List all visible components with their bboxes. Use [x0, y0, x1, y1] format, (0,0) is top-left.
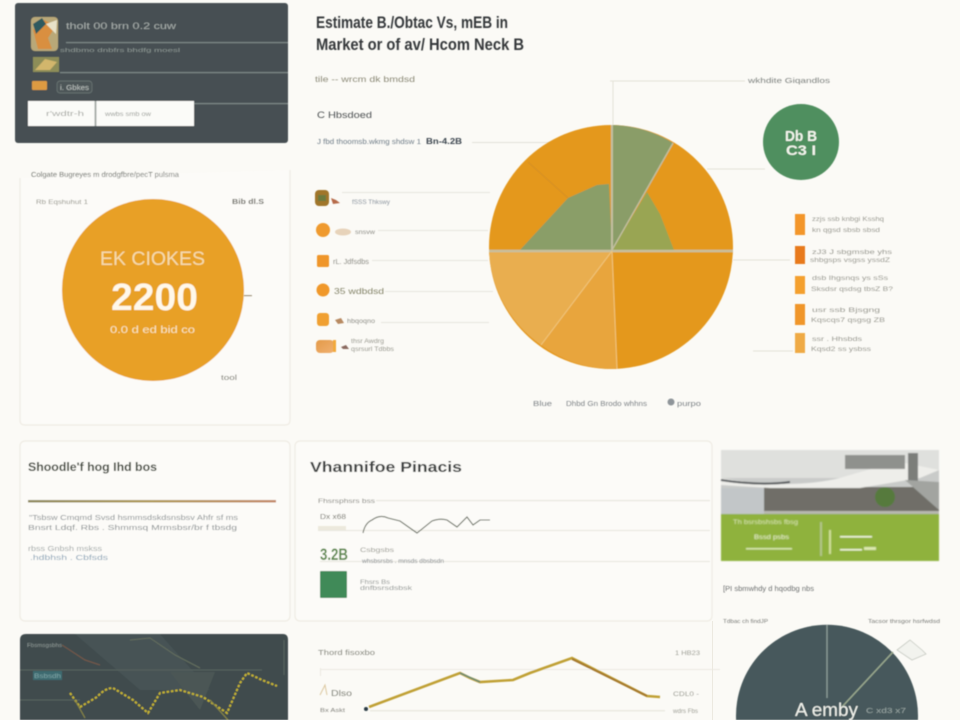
map labels: Fbsmsgsbhs [27, 643, 62, 649]
section detail line [317, 137, 570, 146]
right labels: 1 HB23 [675, 650, 700, 657]
title [316, 13, 524, 54]
pie value: A emby [795, 700, 858, 720]
legend item 2 [795, 246, 893, 264]
tick [244, 295, 252, 296]
slice: bottom left [489, 251, 612, 345]
green strip: Bssd psbs [754, 535, 789, 541]
icon: orange tag [32, 81, 47, 90]
panel: dark map [20, 634, 288, 720]
left caption: Rb Eqshuhut 1 [36, 199, 88, 206]
legend item 2: zJ3 J sbgmsbe yhs [812, 249, 893, 256]
footnote: tool [221, 375, 238, 382]
panel: trends card [295, 441, 712, 621]
panel: notes card [20, 441, 290, 621]
row 4 [316, 284, 493, 296]
small label chip: i. Gbkes [60, 85, 90, 92]
pie chart [489, 81, 793, 369]
row 4: 35 wdbdsd [334, 287, 384, 296]
orange stat circle [62, 199, 244, 381]
section label: C Hbsdoed [317, 110, 372, 120]
row 6: qsrsurl Tdbbs [351, 347, 394, 353]
legend item 1: kn qgsd sbsb sbsd [812, 227, 880, 234]
legend item 4: usr ssb Bjsgng [812, 307, 881, 314]
slice: olive inner [612, 192, 674, 250]
map routes [62, 645, 100, 665]
legend item 5: ssr . Hhsbds [812, 336, 863, 343]
header text: tholt 00 brn 0.2 cuw [66, 21, 176, 32]
dark pie chart [723, 619, 940, 720]
notes paragraph [28, 513, 238, 532]
badge: green circle [763, 104, 839, 180]
pie footer legend: Dhbd Gn Brodo whhns [566, 399, 647, 408]
sparkline [363, 516, 490, 533]
leader lines [610, 81, 793, 351]
card heading: Colgate Bugreyes m drodgfbre/pecT pulsma [31, 172, 179, 179]
line series [369, 658, 660, 707]
row 1 [315, 190, 490, 206]
legend item 2: shbgsps vsgss yssdZ [810, 257, 890, 264]
trends heading: Vhannifoe Pinacis [310, 459, 462, 476]
row 5 [317, 313, 489, 326]
notes paragraph: Bnsrt Ldqf. Rbs . Shmmsq Mrmsbsr/br f tbsdg [28, 523, 237, 532]
panel: dark header card [15, 3, 288, 143]
row rules [318, 500, 710, 562]
green strip [721, 514, 939, 561]
slice dividers [489, 250, 733, 252]
icon: illustration thumbnail [31, 17, 58, 51]
white input table: r'wdtr-h [46, 111, 84, 118]
photo: aerial view [721, 450, 939, 516]
legend item 5 [795, 333, 872, 353]
green swatch [320, 571, 347, 598]
orange stat circle: 0.0 d ed bid co [110, 325, 196, 336]
panel caption: shdbmo dnbfrs bhdfg moesl [60, 48, 180, 54]
dividers [826, 625, 828, 698]
notes link [28, 544, 108, 562]
small label [318, 526, 346, 530]
legend: pie slices [795, 214, 893, 353]
pie footer legend: purpo [677, 399, 701, 408]
map grid [20, 640, 284, 700]
legend item 1: zzjs ssb knbgi Ksshq [812, 216, 884, 223]
row 6 [316, 339, 394, 353]
pie footer legend [533, 398, 701, 408]
pie footer legend: Blue [533, 399, 552, 408]
notes link: .hdbhsh . Cbfsds [30, 553, 108, 562]
section heading: right column: [PI sbmwhdy d hqodbg nbs [723, 584, 814, 593]
notes link: rbss Gnbsh mskss [28, 544, 102, 553]
slice: green mountain [520, 184, 612, 250]
chart heading: Thord fisoxbo [318, 650, 375, 657]
badge: green circle: Db B [785, 128, 817, 145]
white input table [28, 101, 194, 126]
row 1: fSSS Thkswy [352, 199, 391, 206]
stat caption: Csbgsbs [360, 547, 395, 554]
title: Estimate B./Obtac Vs, mEB in [316, 13, 508, 32]
stat: green number: 3.2B [320, 545, 348, 564]
subtitle: tile -- wrcm dk bmdsd [315, 75, 415, 84]
right labels: wdrs Fbs [672, 708, 699, 715]
right labels: CDL0 - [673, 691, 699, 698]
row 6: thsr Awdrg [351, 339, 384, 345]
section detail line: Bn-4.2B [426, 137, 462, 146]
row 3 [317, 255, 488, 267]
row caption: Fhsrsphsrs bss [318, 498, 376, 505]
left caption: Tdbac ch findJP [723, 619, 768, 625]
panel: line chart [318, 650, 720, 715]
row 2 [316, 223, 488, 237]
icon: small illustration [33, 57, 59, 72]
chart rules [320, 668, 720, 712]
green strip: Th bsrsbshsbs fbsg [733, 520, 798, 526]
orange stat circle: 2200 [111, 277, 198, 319]
title: Market or of av/ Hcom Neck B [316, 35, 524, 54]
row 2: snsvw [355, 229, 375, 236]
legend item 3: dsb Ihgsnqs ys sSs [812, 275, 889, 282]
legend item 4: Kqscqs7 qsgsg ZB [811, 317, 885, 324]
legend item 4 [795, 304, 885, 325]
chart axis label: Bx Askt [320, 708, 346, 714]
swatch caption: Fhsrs Bs [360, 579, 391, 586]
map labels [27, 643, 62, 680]
photo card [721, 450, 939, 561]
chart start point [364, 707, 368, 711]
swatch caption [360, 579, 413, 592]
small label chip [57, 81, 92, 93]
legend item 1 [795, 214, 884, 235]
pie detail: C xd3 x7 [866, 706, 906, 715]
right caption: Tacsor thrsgor hsrfwdsd [868, 619, 940, 625]
list: category rows [315, 190, 493, 353]
panel: big number card [20, 170, 290, 425]
map labels: Bsbsdh [34, 674, 61, 680]
badge: green circle: C3 I [786, 142, 816, 158]
icon: paper callout [897, 640, 926, 660]
row 5: hbqoqno [347, 318, 375, 325]
notes heading: Shoodle'f hog Ihd bos [28, 460, 157, 474]
gradient rule [28, 500, 276, 502]
map: dotted trend line [70, 673, 277, 713]
chart left label: Dlso [331, 689, 353, 698]
section detail line: J fbd thoomsb.wkmg shdsw 1 [317, 137, 421, 146]
row 3: rL. Jdfsdbs [333, 259, 370, 266]
swatch caption: dnfbsrsdsbsk [360, 585, 413, 592]
slice: bottom centre [541, 251, 617, 369]
right labels [672, 650, 700, 715]
white input table: wwbs smb ow [104, 112, 152, 118]
legend item 5: Kqsd2 ss ysbss [811, 346, 872, 353]
chart left label [320, 685, 353, 698]
slice: green top [612, 125, 673, 250]
divider column [712, 621, 713, 720]
orange stat circle: EK CIOKES [100, 249, 205, 270]
stat detail: whsbsrsbs . mnsds dbsbsdn [361, 559, 444, 565]
row value: Dx x68 [320, 514, 346, 521]
legend item 3 [795, 275, 893, 294]
top right caption: wkhdite Giqandlos [747, 76, 830, 85]
notes paragraph: "Tsbsw Cmqmd Svsd hsmmsdskdsnsbsv Ahfr sf ms [29, 513, 238, 522]
legend item 3: Sksdsr qsdsg tbsZ B? [811, 286, 893, 293]
right caption: Bib dl.S [232, 199, 264, 206]
